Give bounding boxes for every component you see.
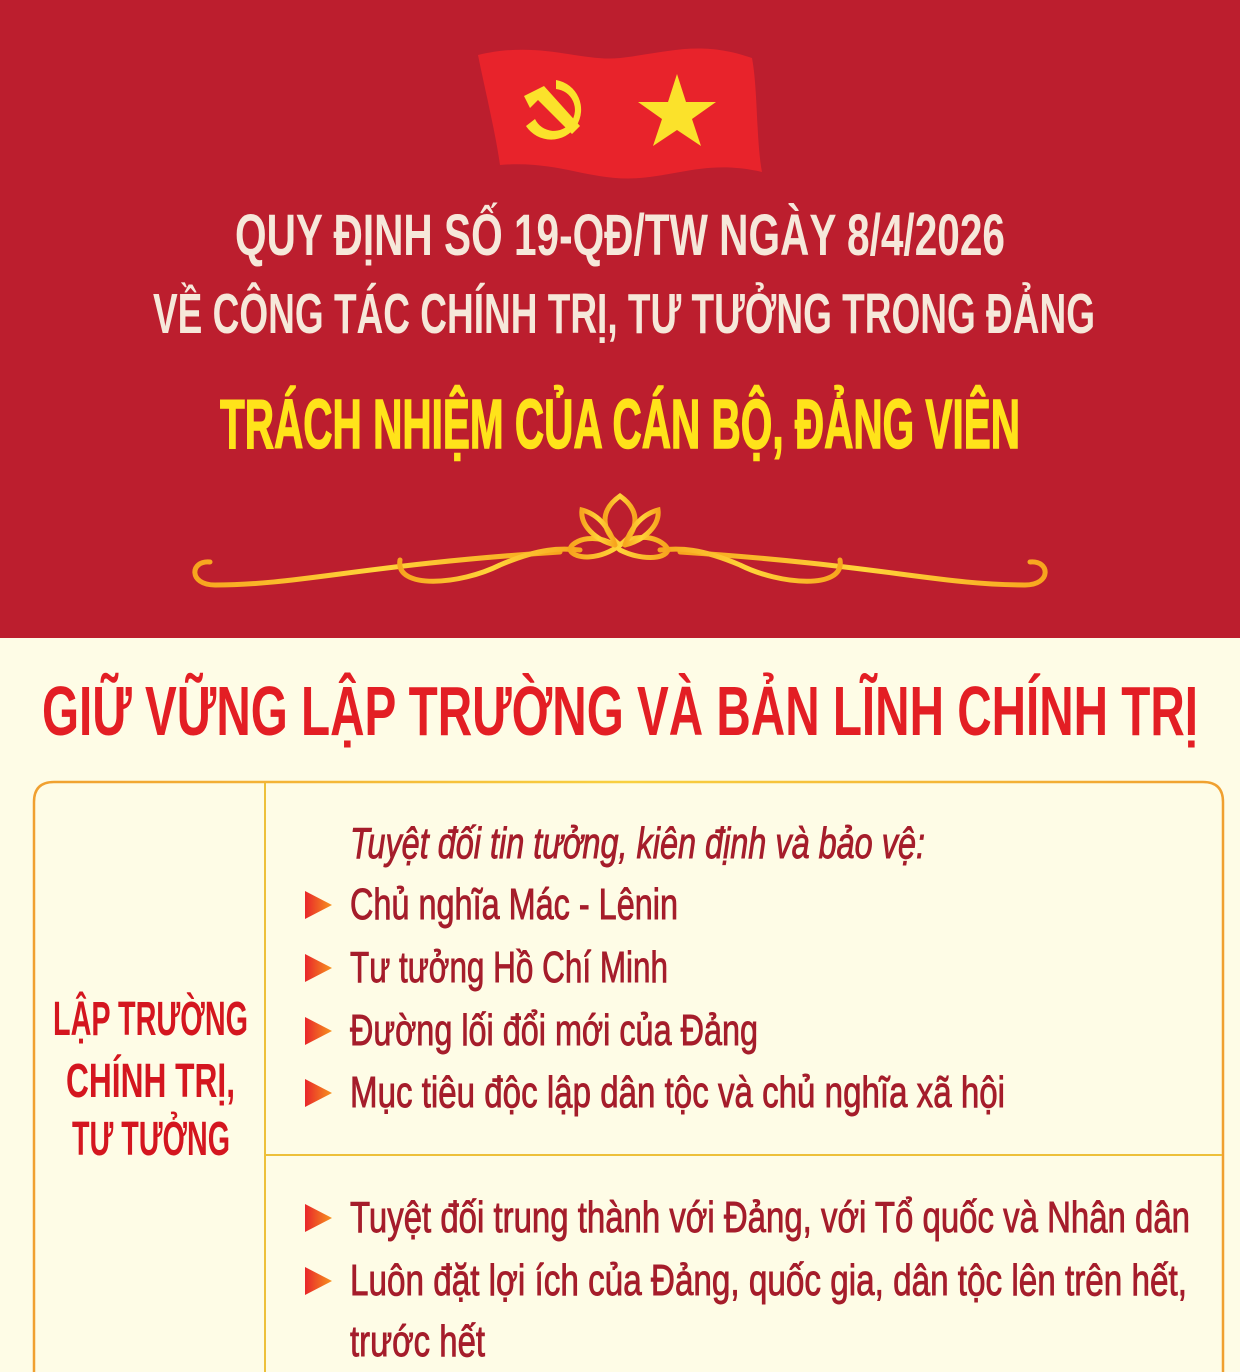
row label: CHÍNH TRỊ, [66,1054,235,1108]
icon: bullet arrows [305,891,332,1295]
panel: table box [34,782,1223,1372]
text block: loyalty list: trước hết [350,1317,485,1366]
text block: belief list: Tuyệt đối tin tưởng, kiên định và bảo vệ: [350,819,925,868]
header background [0,0,1240,638]
icon: party flag [478,48,762,178]
ornament: lotus divider [195,496,1045,585]
text block: belief list: Tư tưởng Hồ Chí Minh [350,943,668,992]
text block: belief list: Chủ nghĩa Mác - Lênin [350,880,678,929]
row label [53,991,248,1166]
text block: belief list: Đường lối đổi mới của Đảng [350,1006,758,1055]
row label: TƯ TƯỞNG [72,1111,230,1166]
row label: LẬP TRƯỜNG [53,991,248,1046]
text block: belief list: Mục tiêu độc lập dân tộc và chủ nghĩa xã hội [350,1068,1005,1117]
text block: loyalty list [350,1193,1190,1366]
text block: belief list [350,819,1005,1117]
title lines [153,203,1095,346]
